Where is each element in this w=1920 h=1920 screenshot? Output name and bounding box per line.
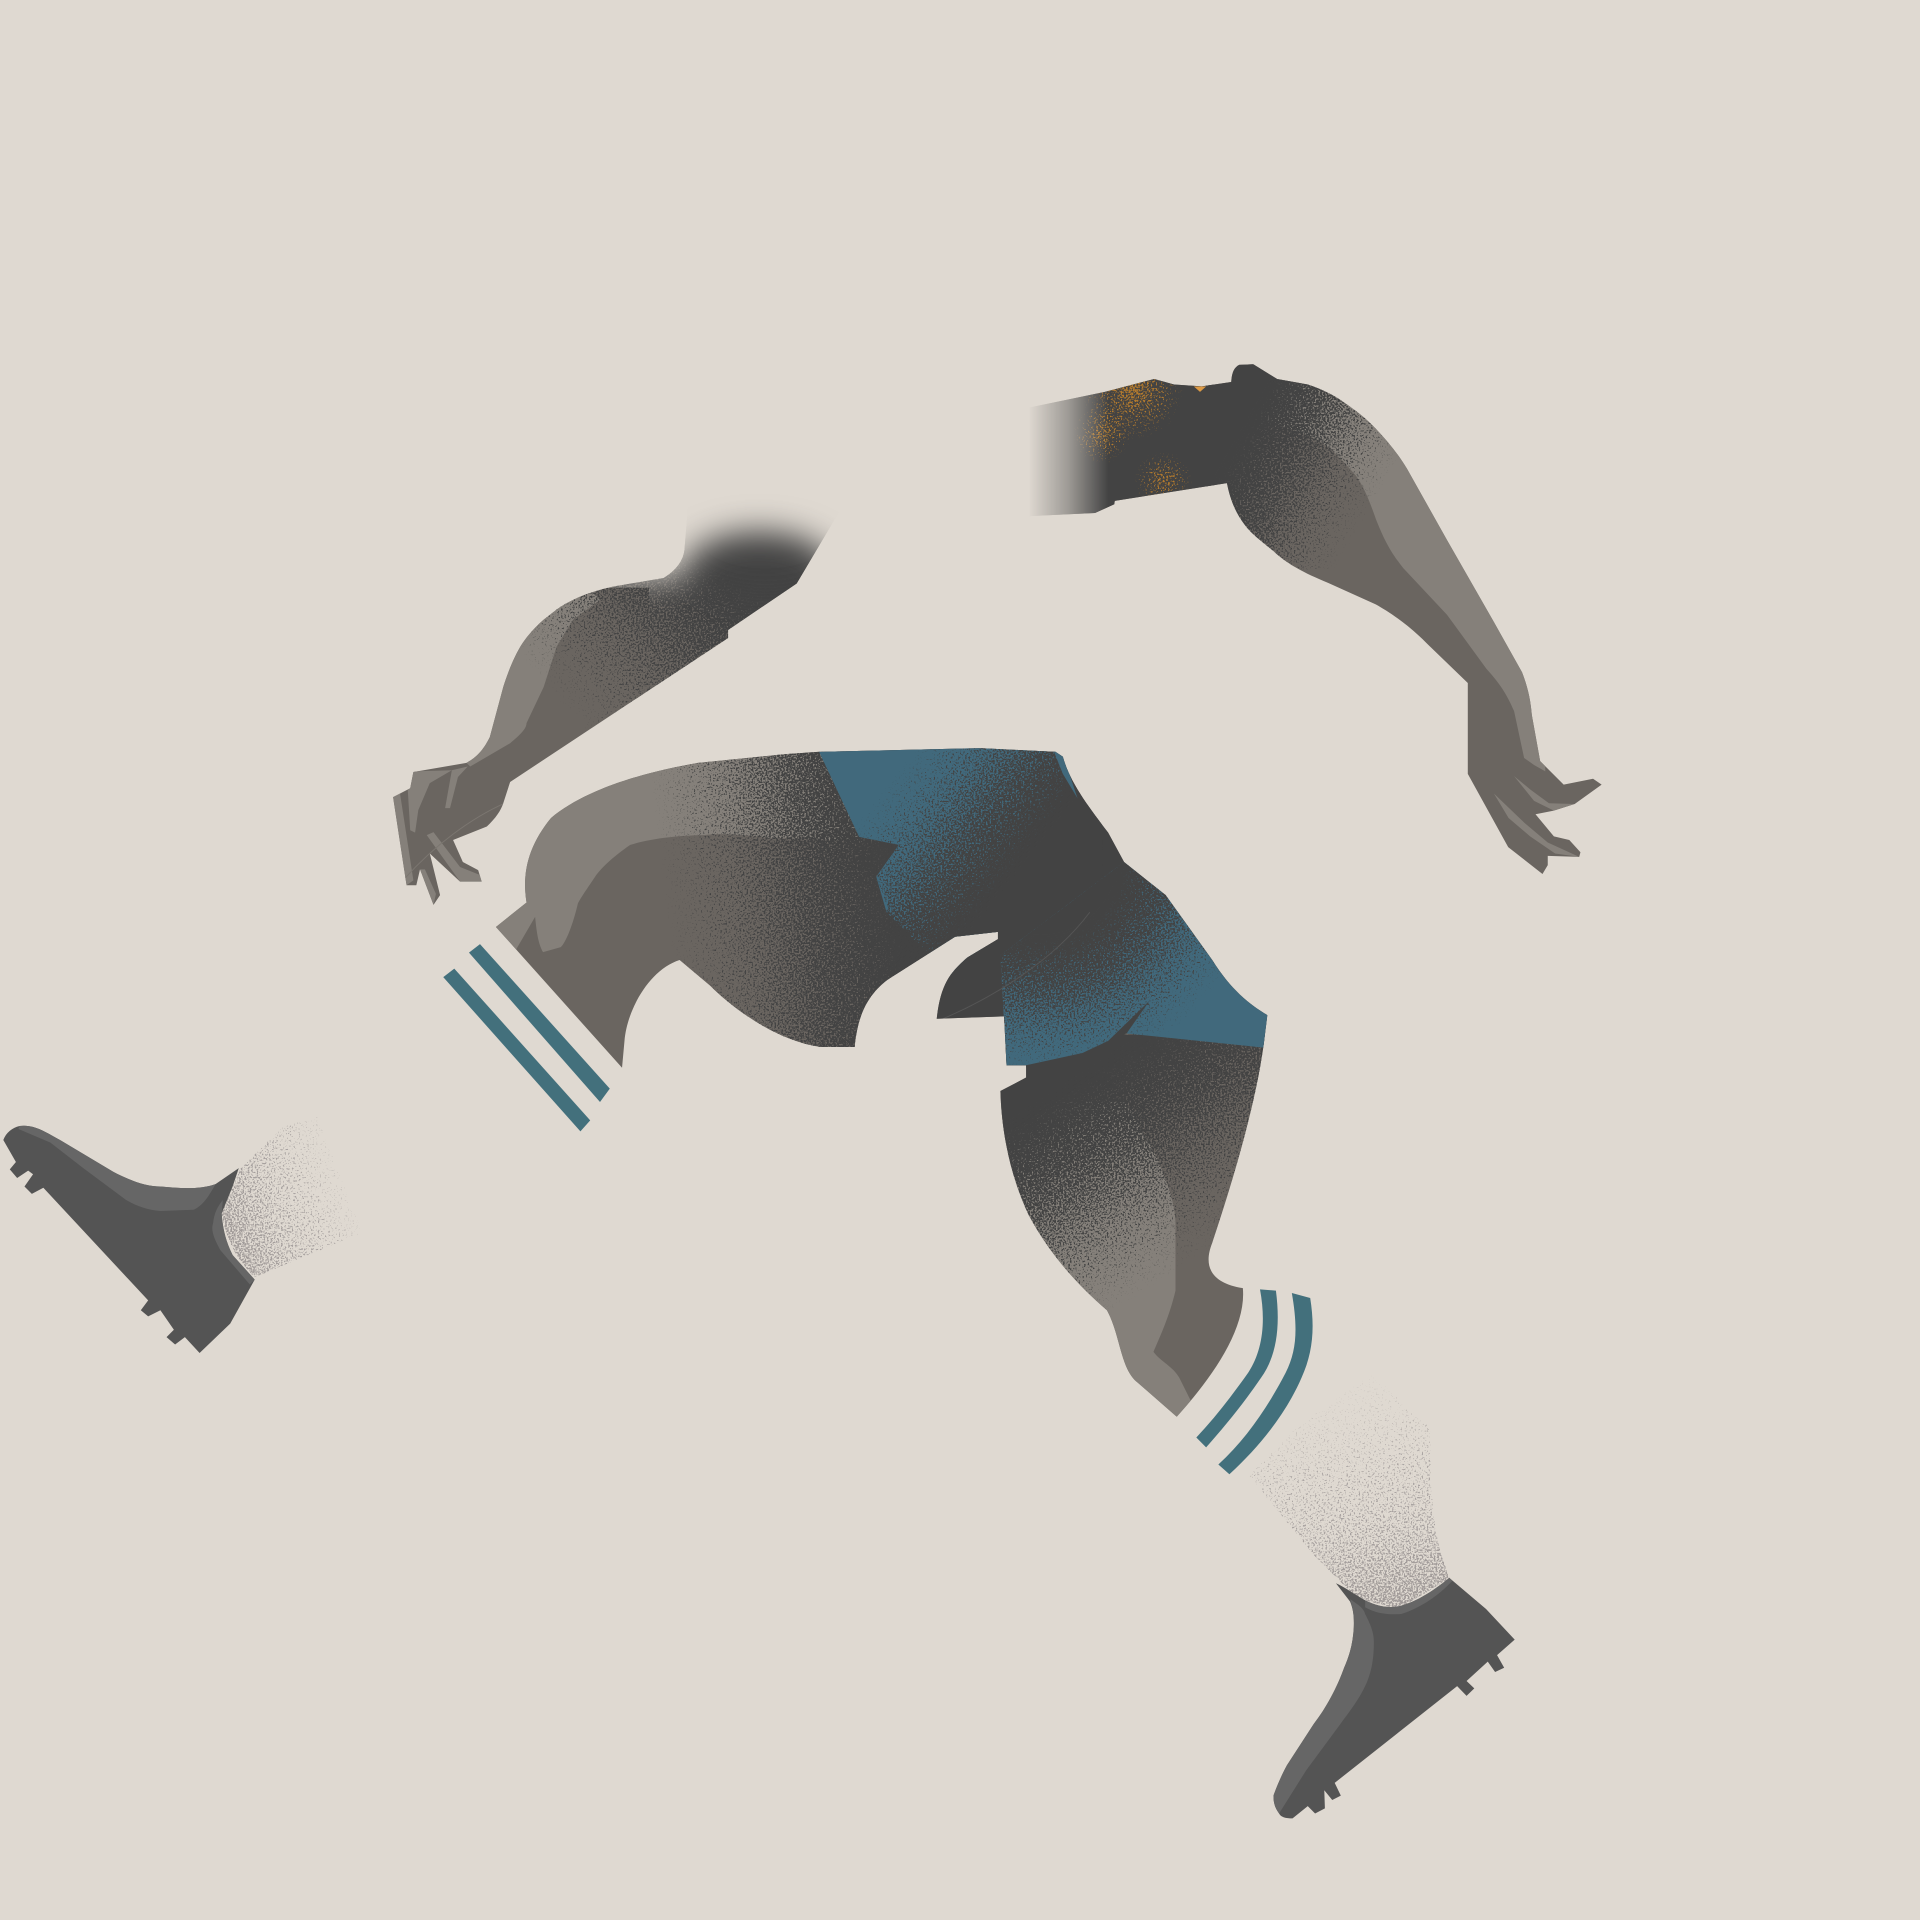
sock stripes: right xyxy=(1196,1289,1313,1474)
boot highlight xyxy=(18,1126,255,1284)
shorts lower teal panel xyxy=(1000,862,1273,1068)
shorts upper teal panel xyxy=(818,744,1063,980)
right arm xyxy=(1033,364,1602,874)
arm dark grain xyxy=(1206,364,1394,570)
orange shirt notch xyxy=(1194,386,1206,392)
boot highlight xyxy=(1273,1578,1452,1813)
waistband teal sliver xyxy=(1053,749,1078,798)
arm base tone xyxy=(393,548,818,905)
thigh dark grain xyxy=(649,735,1286,1068)
boot body xyxy=(1273,1578,1515,1818)
arm highlight band xyxy=(465,576,600,767)
right sock grain xyxy=(1249,1374,1450,1609)
wrist highlight xyxy=(408,767,468,833)
lower leg dark grain xyxy=(992,1035,1273,1310)
skin base xyxy=(490,735,1286,1433)
right boot xyxy=(1273,1578,1515,1818)
left sock grain xyxy=(222,1117,362,1277)
finger highlights xyxy=(393,793,482,905)
left arm xyxy=(393,507,830,905)
crease line xyxy=(943,912,1090,1019)
boot body xyxy=(3,1126,255,1353)
arm base tone xyxy=(1056,364,1602,874)
shorts upper dark grain xyxy=(818,735,1102,980)
arm highlight band xyxy=(1237,355,1545,771)
orange grain flecks xyxy=(1076,379,1192,496)
shoulder shadow xyxy=(682,544,820,602)
wrist crease xyxy=(404,803,504,879)
finger highlights xyxy=(1494,776,1579,857)
lower leg highlight xyxy=(980,1102,1191,1427)
shorts lower dark grain xyxy=(1000,862,1273,1068)
upper arm dark section xyxy=(1045,379,1214,516)
sock stripes: left xyxy=(443,944,610,1131)
left boot xyxy=(3,1126,255,1353)
arm dark grain xyxy=(522,544,820,728)
bent leg highlight xyxy=(490,735,899,953)
body: thighs and shorts xyxy=(490,735,1286,1433)
illustration: faded footballer mid-stride xyxy=(3,364,1602,1818)
